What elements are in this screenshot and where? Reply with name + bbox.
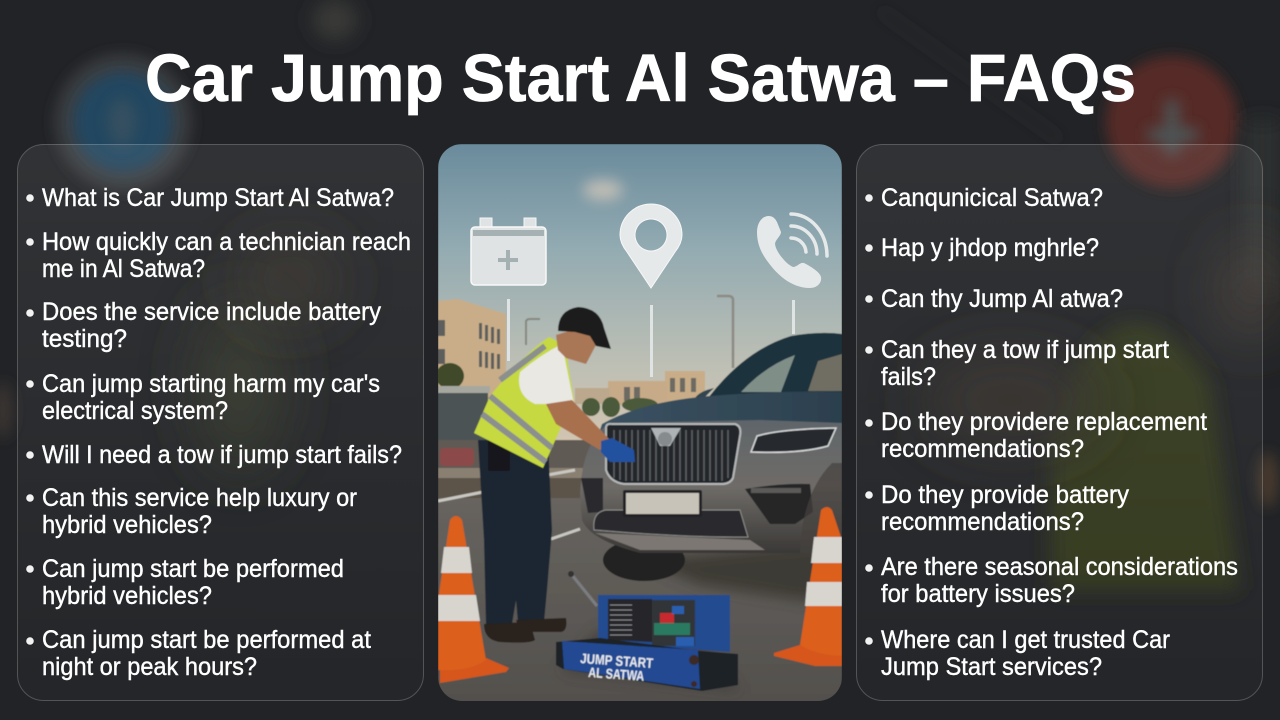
question: trusted services <box>865 626 1170 681</box>
question: night or peak hours <box>26 626 371 681</box>
icon: phone with signal <box>757 214 827 288</box>
question: battery recommendations <box>865 481 1129 536</box>
question: luxury or hybrid vehicles <box>26 484 357 539</box>
question: electrical system harm: electrical system? <box>42 397 228 425</box>
question: electrical system harm: Can jump starting harm my car's <box>42 370 380 398</box>
icon: location pin <box>620 204 682 288</box>
worker <box>474 307 635 643</box>
question: trusted services: Where can I get trusted Car <box>881 626 1170 654</box>
panel: central roadside photo illustration <box>436 144 842 702</box>
question: performed on hybrid vehicles <box>26 555 344 610</box>
title: Car Jump Start Al Satwa – FAQs <box>145 41 1136 116</box>
question: tow if jump start fails: Can they a tow if jump start <box>881 336 1169 364</box>
question: luxury or hybrid vehicles: Can this service help luxury or <box>42 484 357 512</box>
question: technician arrival time: me in Al Satwa? <box>42 255 205 283</box>
question: technician arrival time: How quickly can a technician reach <box>42 228 411 256</box>
question: battery testing <box>26 298 381 353</box>
question: seasonal considerations <box>865 553 1238 608</box>
question: battery recommendations: recommendations? <box>881 508 1084 536</box>
question: tow: Will I need a tow if jump start fails? <box>42 441 402 469</box>
jump starter box with label: AL SATWA <box>588 664 645 684</box>
question: battery recommendations: Do they provide battery <box>881 481 1129 509</box>
icon: battery <box>471 218 546 285</box>
left traffic cone <box>438 516 509 683</box>
question: what is the service: What is Car Jump Start Al Satwa? <box>42 184 394 212</box>
question: tow if jump start fails <box>865 336 1169 391</box>
scenery buildings <box>436 296 733 539</box>
jump starter box with label <box>556 571 740 691</box>
question: garbled second line: Hap y jhdop mghrle? <box>881 234 1099 262</box>
question: seasonal considerations: Are there seasonal considerations <box>881 553 1238 581</box>
question: technician arrival time <box>26 228 411 283</box>
question: replacement recommendations: recommendations? <box>881 435 1084 463</box>
question: night or peak hours: Can jump start be performed at <box>42 626 371 654</box>
question: night or peak hours: night or peak hours? <box>42 653 257 681</box>
question: luxury or hybrid vehicles: hybrid vehicles? <box>42 511 212 539</box>
icon connector lines <box>507 299 795 377</box>
question: performed on hybrid vehicles: Can jump start be performed <box>42 555 344 583</box>
question: electrical system harm <box>26 370 380 425</box>
car <box>580 333 842 600</box>
question: battery testing: Does the service include battery <box>42 298 381 326</box>
question: replacement recommendations: Do they providere replacement <box>881 408 1207 436</box>
question: seasonal considerations: for battery issues? <box>881 580 1075 608</box>
question: garbled Satwa line: Canqunicical Satwa? <box>881 184 1103 212</box>
panel: right FAQ list <box>856 144 1262 700</box>
question: replacement recommendations <box>865 408 1207 463</box>
panel: left FAQ list <box>18 144 424 700</box>
question: battery testing: testing? <box>42 325 127 353</box>
question: garbled third line: Can thy Jump Al atwa? <box>881 285 1123 313</box>
right traffic cone <box>774 507 842 666</box>
jump starter box with label: JUMP START <box>580 650 654 671</box>
question: performed on hybrid vehicles: hybrid vehicles? <box>42 582 212 610</box>
question: trusted services: Jump Start services? <box>881 653 1102 681</box>
question: tow if jump start fails: fails? <box>881 363 936 391</box>
